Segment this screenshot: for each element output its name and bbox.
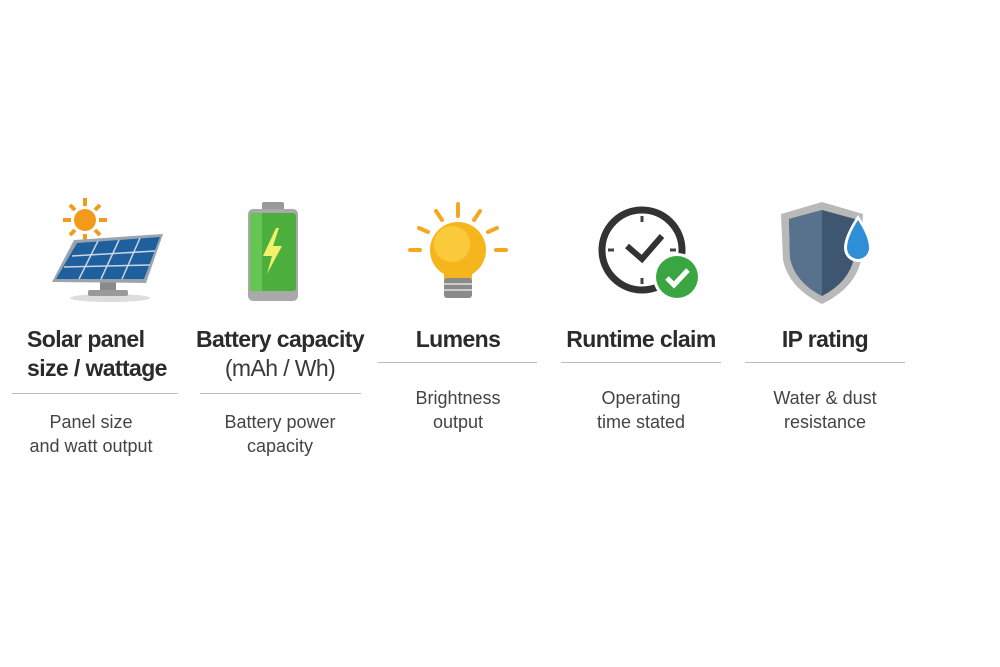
column 1 description: and watt output [29, 436, 153, 456]
column 3 description: output [433, 412, 483, 432]
icon: battery [248, 202, 298, 301]
column 4 description [597, 388, 685, 432]
column 4 description: Operating [601, 388, 681, 408]
icon: solar panel [52, 198, 163, 302]
column 5 description [773, 388, 877, 432]
column 3 description: Brightness [415, 388, 501, 408]
icon: light bulb [408, 202, 508, 298]
column 2 description [224, 412, 336, 456]
icon: clock with check [598, 206, 698, 298]
column 1 description: Panel size [49, 412, 133, 432]
sun [63, 198, 107, 242]
column 3 title: Lumens [416, 326, 500, 352]
column 5 description: Water & dust [773, 388, 877, 408]
column 1 title: Solar panel [27, 326, 144, 352]
column 4 description: time stated [597, 412, 685, 432]
column 2 title: (mAh / Wh) [225, 355, 335, 381]
column 1 title [27, 326, 167, 381]
column 2 title: Battery capacity [196, 326, 364, 352]
icon: shield with drop [781, 202, 869, 304]
column 1 description [29, 412, 153, 456]
column 4 title: Runtime claim [566, 326, 716, 352]
column 1 title: size / wattage [27, 355, 167, 381]
column 5 title: IP rating [782, 326, 868, 352]
column 2 description: capacity [247, 436, 313, 456]
column 2 description: Battery power [224, 412, 336, 432]
column 3 description [415, 388, 501, 432]
column 2 title [196, 326, 364, 381]
column 5 description: resistance [784, 412, 866, 432]
